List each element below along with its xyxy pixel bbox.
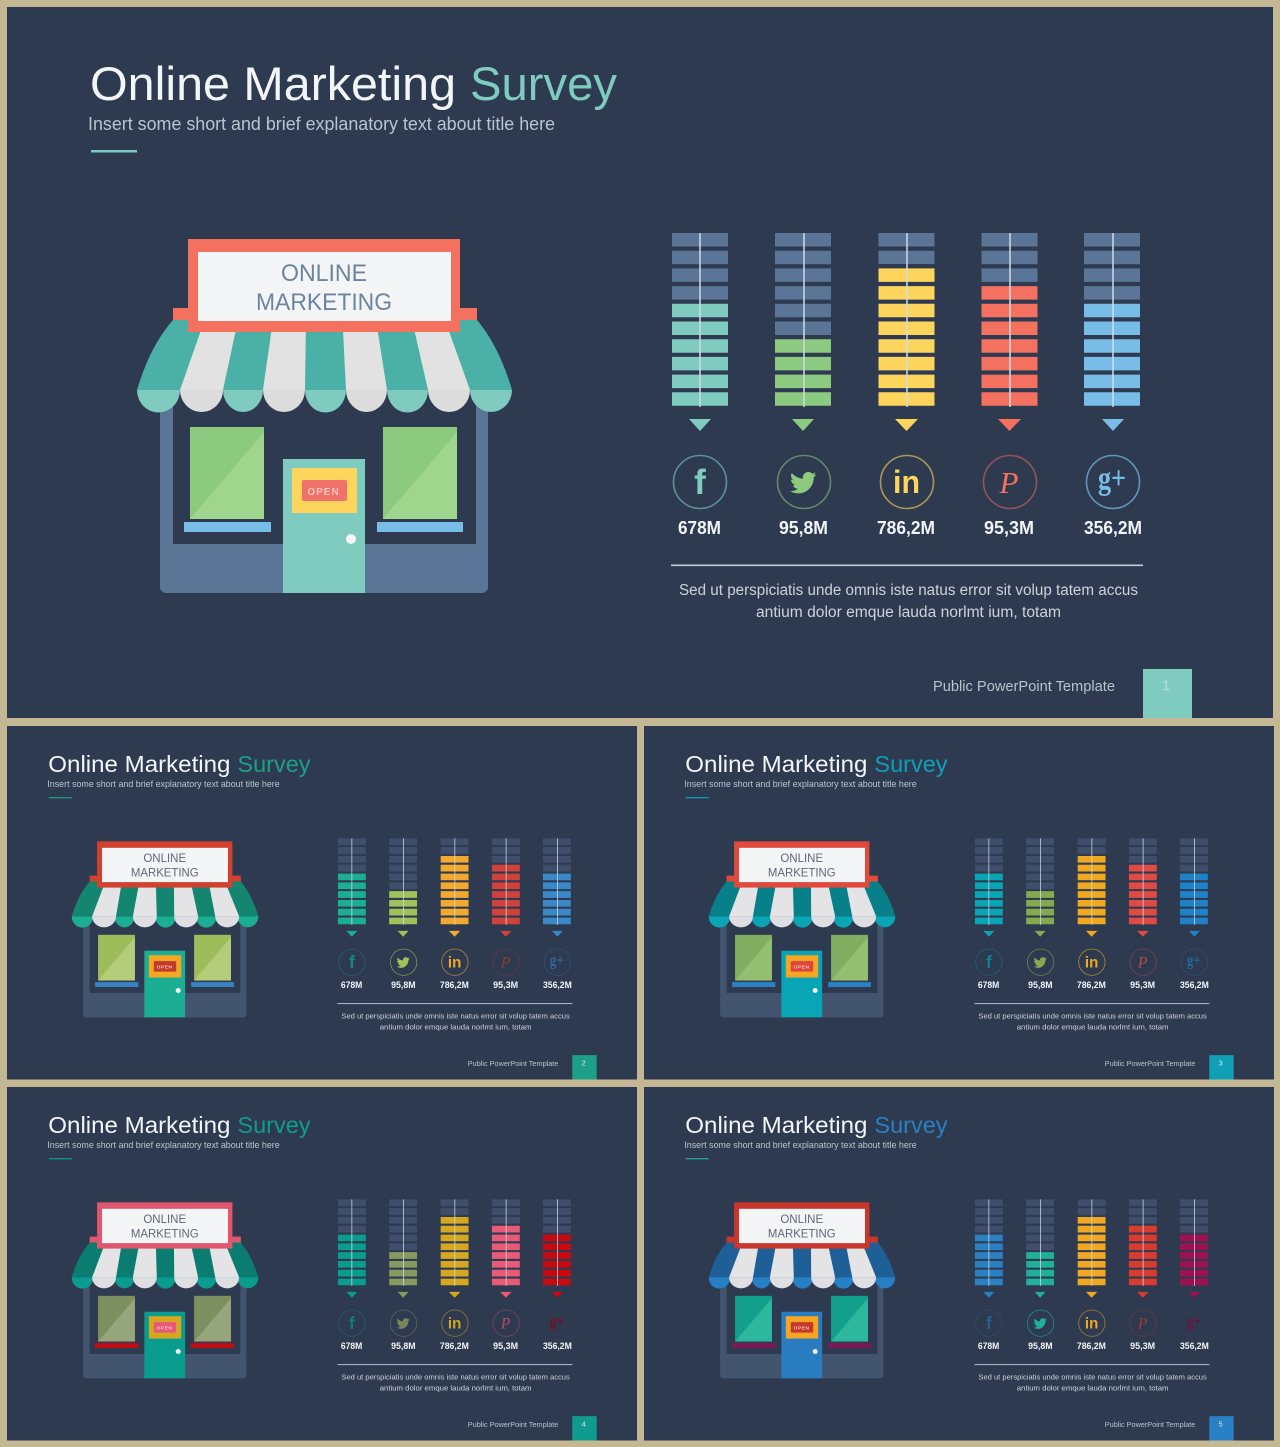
icon: facebook: f: [986, 1313, 992, 1333]
bar: facebook: [983, 1199, 994, 1298]
icon: linkedin: in: [448, 1316, 461, 1333]
footer label: Public PowerPoint Template: [933, 679, 1115, 695]
illustration: storefront: [709, 841, 895, 1017]
icon: facebook: [674, 456, 726, 508]
bar: google plus: [1189, 1199, 1200, 1298]
icon: facebook: [976, 949, 1002, 975]
icon: door with open sign: [781, 1312, 822, 1378]
shop sign: MARKETING: [131, 1227, 199, 1241]
bar: facebook: [689, 233, 711, 431]
icon: left window: [184, 427, 271, 532]
icon: door with open sign: [144, 1312, 185, 1378]
bar: pinterest: [1137, 838, 1149, 937]
shop sign: [734, 1202, 869, 1249]
icon: striped awning: [137, 308, 512, 413]
icon: striped awning: [709, 1237, 895, 1289]
bar: twitter: [792, 233, 814, 431]
icon: google plus: [1181, 949, 1208, 975]
icon: right window: [828, 935, 871, 987]
bar: facebook: [346, 1199, 357, 1298]
icon: door with open sign: OPEN: [156, 965, 173, 971]
page number badge: 4: [582, 1422, 586, 1429]
icon: door with open sign: [144, 951, 185, 1017]
page number badge: [1209, 1055, 1234, 1080]
bar: pinterest: [500, 1199, 512, 1298]
page number badge: [572, 1416, 597, 1440]
value: 95,3M: 95,3M: [1130, 980, 1155, 990]
icon: google plus: [544, 1310, 571, 1336]
subtitle: Insert some short and brief explanatory text about title here: [88, 114, 555, 134]
description text: antium dolor emque lauda norlmt ium, totam: [756, 604, 1061, 621]
value: 95,8M: 95,8M: [779, 517, 828, 538]
icon: google plus: g+: [1187, 1312, 1201, 1331]
subtitle: Insert some short and brief explanatory text about title here: [684, 1140, 917, 1150]
footer label: Public PowerPoint Template: [468, 1059, 558, 1068]
description text: Sed ut perspiciatis unde omnis iste natus error sit volup tatem accus: [341, 1011, 570, 1020]
bar: linkedin: [449, 1199, 460, 1298]
shop sign: MARKETING: [131, 866, 199, 880]
value: 786,2M: 786,2M: [1077, 980, 1106, 990]
value: 786,2M: 786,2M: [1077, 1341, 1106, 1351]
bar: pinterest: [1137, 1199, 1149, 1298]
subtitle: Insert some short and brief explanatory text about title here: [684, 779, 917, 789]
footer label: Public PowerPoint Template: [468, 1420, 558, 1429]
description text: Sed ut perspiciatis unde omnis iste natus error sit volup tatem accus: [978, 1372, 1207, 1381]
social icons and values: [976, 949, 1209, 990]
panel: slide 5: [644, 1087, 1274, 1440]
bar: pinterest: [500, 838, 512, 937]
page number badge: 5: [1219, 1422, 1223, 1429]
social icons and values: [976, 1310, 1209, 1351]
icon: door with open sign: OPEN: [307, 487, 340, 498]
illustration: storefront: [72, 1202, 258, 1378]
subtitle: Insert some short and brief explanatory text about title here: [47, 1140, 280, 1150]
page number badge: 1: [1162, 677, 1170, 693]
subtitle: Insert some short and brief explanatory text about title here: [47, 779, 280, 789]
icon: left window: [95, 935, 138, 987]
icon: pinterest: [493, 949, 519, 975]
illustration: storefront: [72, 841, 258, 1017]
illustration: storefront: [709, 1202, 895, 1378]
value: 356,2M: 356,2M: [1084, 517, 1142, 538]
bar: google plus: [552, 1199, 563, 1298]
bar chart: [346, 838, 563, 937]
bar: twitter: [398, 838, 409, 937]
shop sign: [734, 841, 869, 888]
bar: twitter: [1035, 1199, 1046, 1298]
bar chart: [689, 233, 1124, 431]
panel: slide 3: [644, 726, 1274, 1080]
page number badge: [1209, 1416, 1234, 1440]
description text: antium dolor emque lauda norlmt ium, totam: [1017, 1022, 1169, 1031]
icon: left window: [732, 935, 775, 987]
bar: twitter: [398, 1199, 409, 1298]
bar: facebook: [983, 838, 994, 937]
shop sign: MARKETING: [256, 289, 392, 316]
icon: pinterest: P: [1137, 955, 1148, 972]
title accent line: [686, 1158, 709, 1159]
value: 95,8M: 95,8M: [1028, 1341, 1053, 1351]
value: 678M: 678M: [678, 517, 721, 538]
value: 786,2M: 786,2M: [440, 980, 469, 990]
shop sign: MARKETING: [768, 1227, 836, 1241]
icon: google plus: [1181, 1310, 1208, 1336]
page number badge: [1143, 669, 1192, 718]
icon: google plus: g+: [1187, 951, 1201, 970]
title: Survey: [874, 1112, 948, 1138]
shop sign: [188, 239, 460, 332]
icon: linkedin: [1079, 1310, 1105, 1336]
shop sign: ONLINE: [780, 851, 823, 865]
bar: linkedin: [1086, 838, 1097, 937]
icon: google plus: g+: [550, 951, 564, 970]
description text: Sed ut perspiciatis unde omnis iste natus error sit volup tatem accus: [679, 582, 1138, 599]
description text: [341, 1011, 570, 1031]
icon: pinterest: P: [500, 1316, 511, 1333]
shop sign: ONLINE: [780, 1212, 823, 1226]
description text: antium dolor emque lauda norlmt ium, totam: [380, 1383, 532, 1392]
icon: pinterest: [984, 456, 1036, 508]
value: 95,3M: 95,3M: [493, 1341, 518, 1351]
icon: google plus: [544, 949, 571, 975]
bar: pinterest: [998, 233, 1021, 431]
description text: antium dolor emque lauda norlmt ium, totam: [1017, 1383, 1169, 1392]
value: 95,8M: 95,8M: [391, 1341, 416, 1351]
illustration: storefront: [137, 239, 512, 593]
icon: pinterest: P: [1137, 1316, 1148, 1333]
icon: left window: [732, 1296, 775, 1348]
icon: facebook: [976, 1310, 1002, 1336]
bar chart: [983, 838, 1200, 937]
icon: pinterest: [493, 1310, 519, 1336]
bar: linkedin: [895, 233, 918, 431]
icon: right window: [828, 1296, 871, 1348]
bar: google plus: [1189, 838, 1200, 937]
title: Online Marketing: [685, 1112, 867, 1138]
icon: facebook: f: [349, 1313, 355, 1333]
icon: pinterest: [1130, 949, 1156, 975]
icon: linkedin: in: [893, 464, 920, 500]
social icons and values: [339, 949, 572, 990]
page number badge: 3: [1219, 1061, 1223, 1068]
bar: linkedin: [1086, 1199, 1097, 1298]
icon: right window: [191, 935, 234, 987]
page number badge: [572, 1055, 597, 1080]
page number badge: 2: [582, 1061, 586, 1068]
icon: door with open sign: OPEN: [156, 1326, 173, 1332]
social icons and values: [674, 456, 1142, 538]
footer label: Public PowerPoint Template: [1105, 1420, 1195, 1429]
title: Online Marketing: [48, 1112, 230, 1138]
icon: facebook: [339, 949, 365, 975]
icon: door with open sign: [283, 459, 365, 593]
bar: facebook: [346, 838, 357, 937]
title: Survey: [874, 751, 948, 777]
icon: google plus: g+: [550, 1312, 564, 1331]
icon: striped awning: [72, 1237, 258, 1289]
value: 95,3M: 95,3M: [1130, 1341, 1155, 1351]
bar chart: [983, 1199, 1200, 1298]
social icons and values: [339, 1310, 572, 1351]
value: 95,3M: 95,3M: [984, 517, 1034, 538]
icon: door with open sign: [781, 951, 822, 1017]
title: Online Marketing: [90, 57, 456, 110]
panel: slide 4: [7, 1087, 637, 1440]
title accent line: [49, 1158, 72, 1159]
icon: facebook: f: [349, 952, 355, 972]
bar chart: [346, 1199, 563, 1298]
icon: linkedin: [442, 1310, 468, 1336]
title: Survey: [237, 1112, 311, 1138]
description text: antium dolor emque lauda norlmt ium, totam: [380, 1022, 532, 1031]
value: 356,2M: 356,2M: [543, 1341, 572, 1351]
icon: linkedin: in: [1085, 1316, 1098, 1333]
icon: linkedin: in: [448, 955, 461, 972]
shop sign: MARKETING: [768, 866, 836, 880]
shop sign: ONLINE: [281, 260, 367, 287]
icon: twitter: [1027, 949, 1054, 975]
icon: door with open sign: OPEN: [793, 1326, 810, 1332]
title accent line: [91, 150, 137, 152]
shop sign: ONLINE: [143, 1212, 186, 1226]
description text: [978, 1011, 1207, 1031]
footer label: Public PowerPoint Template: [1105, 1059, 1195, 1068]
icon: linkedin: in: [1085, 955, 1098, 972]
value: 786,2M: 786,2M: [877, 517, 935, 538]
icon: striped awning: [72, 876, 258, 928]
title: Online Marketing: [685, 751, 867, 777]
value: 95,3M: 95,3M: [493, 980, 518, 990]
icon: linkedin: [1079, 949, 1105, 975]
icon: facebook: [339, 1310, 365, 1336]
icon: pinterest: P: [999, 465, 1019, 500]
icon: right window: [191, 1296, 234, 1348]
title accent line: [686, 797, 709, 798]
icon: facebook: f: [986, 952, 992, 972]
icon: door with open sign: OPEN: [793, 965, 810, 971]
bar: google plus: [1102, 233, 1124, 431]
value: 95,8M: 95,8M: [1028, 980, 1053, 990]
shop sign: [97, 841, 232, 888]
icon: pinterest: [1130, 1310, 1156, 1336]
value: 786,2M: 786,2M: [440, 1341, 469, 1351]
description text: Sed ut perspiciatis unde omnis iste natus error sit volup tatem accus: [978, 1011, 1207, 1020]
icon: twitter: [390, 949, 417, 975]
value: 678M: 678M: [978, 1341, 1000, 1351]
bar: twitter: [1035, 838, 1046, 937]
icon: striped awning: [709, 876, 895, 928]
value: 356,2M: 356,2M: [1180, 980, 1209, 990]
panel: slide 2: [7, 726, 637, 1080]
bar: linkedin: [449, 838, 460, 937]
bar: google plus: [552, 838, 563, 937]
panel: main slide 1: [7, 7, 1273, 718]
shop sign: ONLINE: [143, 851, 186, 865]
description text: [679, 582, 1138, 621]
value: 356,2M: 356,2M: [1180, 1341, 1209, 1351]
icon: google plus: [1086, 456, 1140, 508]
value: 95,8M: 95,8M: [391, 980, 416, 990]
icon: linkedin: [442, 949, 468, 975]
value: 678M: 678M: [341, 980, 363, 990]
icon: pinterest: P: [500, 955, 511, 972]
shop sign: [97, 1202, 232, 1249]
icon: twitter: [1027, 1310, 1054, 1336]
title: Survey: [237, 751, 311, 777]
value: 356,2M: 356,2M: [543, 980, 572, 990]
icon: twitter: [778, 456, 830, 508]
description text: [978, 1372, 1207, 1392]
icon: linkedin: [880, 456, 934, 508]
icon: facebook: f: [694, 463, 706, 502]
icon: left window: [95, 1296, 138, 1348]
icon: twitter: [390, 1310, 417, 1336]
title accent line: [49, 797, 72, 798]
icon: google plus: g+: [1098, 461, 1126, 497]
description text: Sed ut perspiciatis unde omnis iste natus error sit volup tatem accus: [341, 1372, 570, 1381]
icon: right window: [377, 427, 463, 532]
title: Online Marketing: [48, 751, 230, 777]
value: 678M: 678M: [341, 1341, 363, 1351]
description text: [341, 1372, 570, 1392]
value: 678M: 678M: [978, 980, 1000, 990]
title: Survey: [470, 57, 617, 110]
